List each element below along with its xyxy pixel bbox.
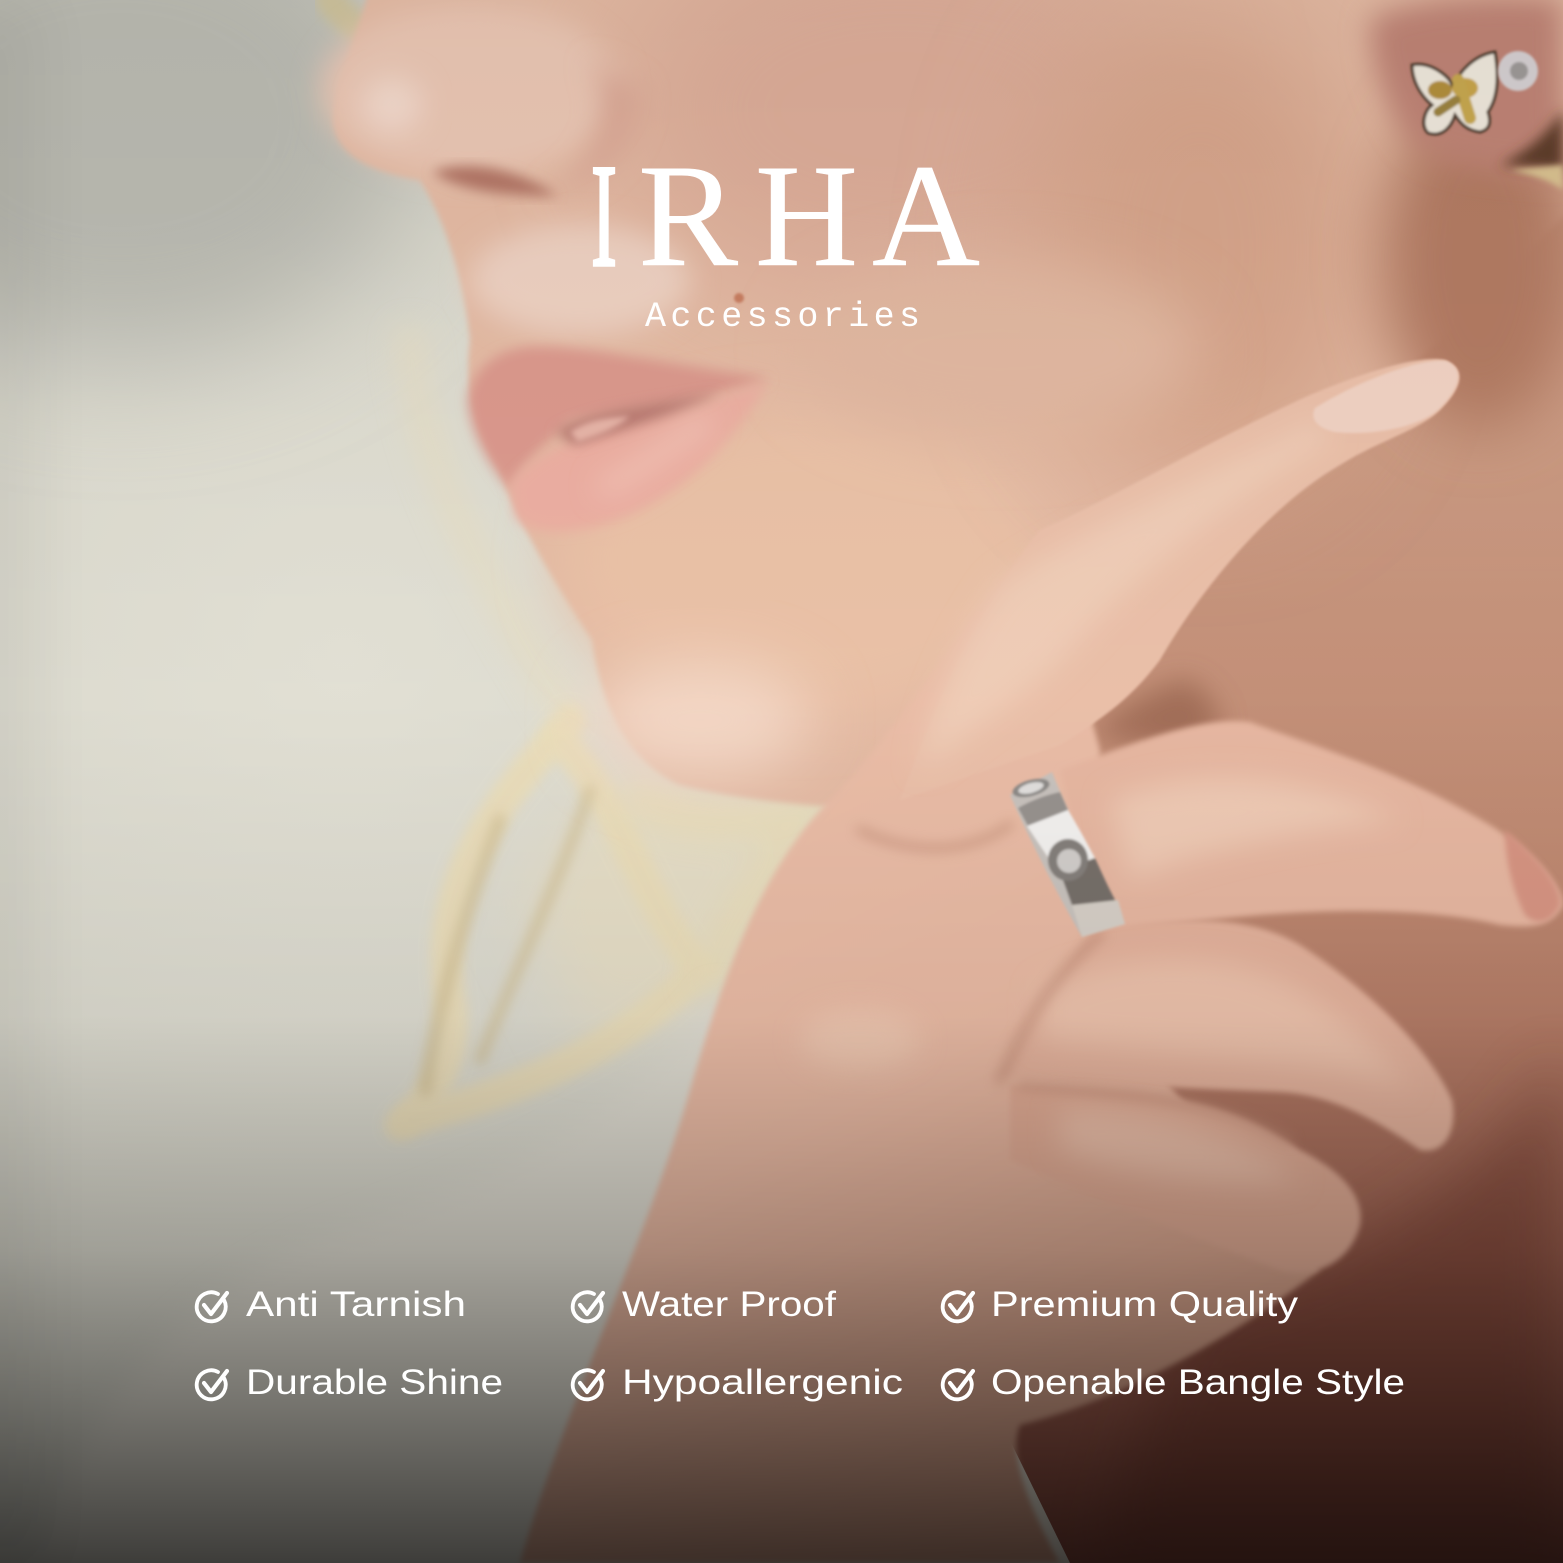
middle finger highlight — [1110, 779, 1400, 880]
fingernail — [1313, 361, 1458, 433]
feature: Anti Tarnish: Anti Tarnish — [246, 1285, 466, 1324]
brand logo: IRHA: I — [591, 134, 617, 297]
silver ring — [1010, 772, 1125, 937]
shadow under jaw — [1090, 680, 1220, 750]
shirt on the right of the wrist — [1000, 1400, 1110, 1563]
feature: Premium Quality: Premium Quality — [991, 1285, 1299, 1324]
brand logo: IRHA: R — [638, 134, 738, 297]
blond hair behind ear — [1510, 165, 1563, 190]
mole — [734, 293, 744, 303]
little finger — [1010, 1085, 1361, 1273]
ring finger highlight — [1040, 960, 1410, 1090]
wall shading top left — [0, 0, 420, 360]
butterfly earring — [1412, 52, 1497, 134]
feature: Anti Tarnish — [197, 1285, 466, 1324]
cheek tones — [560, 0, 1563, 780]
feature: Durable Shine: Durable Shine — [246, 1363, 503, 1402]
feature: Hypoallergenic: Hypoallergenic — [622, 1363, 903, 1402]
index finger shading — [920, 420, 1330, 770]
face — [333, 0, 1563, 810]
dark area beyond neck — [1100, 1050, 1563, 1563]
shirt — [40, 990, 760, 1563]
blurred blond hair — [330, 0, 810, 1125]
dark hair behind ear — [1500, 110, 1563, 170]
brand logo: IRHA: A — [872, 134, 980, 297]
knuckle shadow lines — [860, 825, 1290, 1140]
little finger highlight — [1060, 1110, 1300, 1184]
brand logo: IRHA — [591, 134, 980, 297]
middle finger — [1060, 721, 1563, 935]
middle fingertip — [1505, 830, 1560, 922]
hand highlights — [800, 1010, 920, 1070]
left edge vignette — [0, 0, 40, 1563]
hand back and wrist — [520, 535, 1320, 1563]
index finger — [900, 359, 1459, 800]
ring finger — [1000, 920, 1453, 1151]
neck and shoulder — [880, 180, 1563, 1563]
feature: Openable Bangle Style: Openable Bangle Style — [991, 1363, 1405, 1402]
brand subtitle: Accessories: Accessories — [645, 297, 920, 337]
ear — [1370, 0, 1563, 175]
nose — [320, 5, 690, 335]
lips — [468, 347, 770, 531]
feature list — [197, 1285, 1405, 1402]
silver stud earring — [1498, 51, 1538, 91]
brand logo: IRHA: H — [755, 134, 858, 297]
feature: Water Proof: Water Proof — [622, 1285, 836, 1324]
